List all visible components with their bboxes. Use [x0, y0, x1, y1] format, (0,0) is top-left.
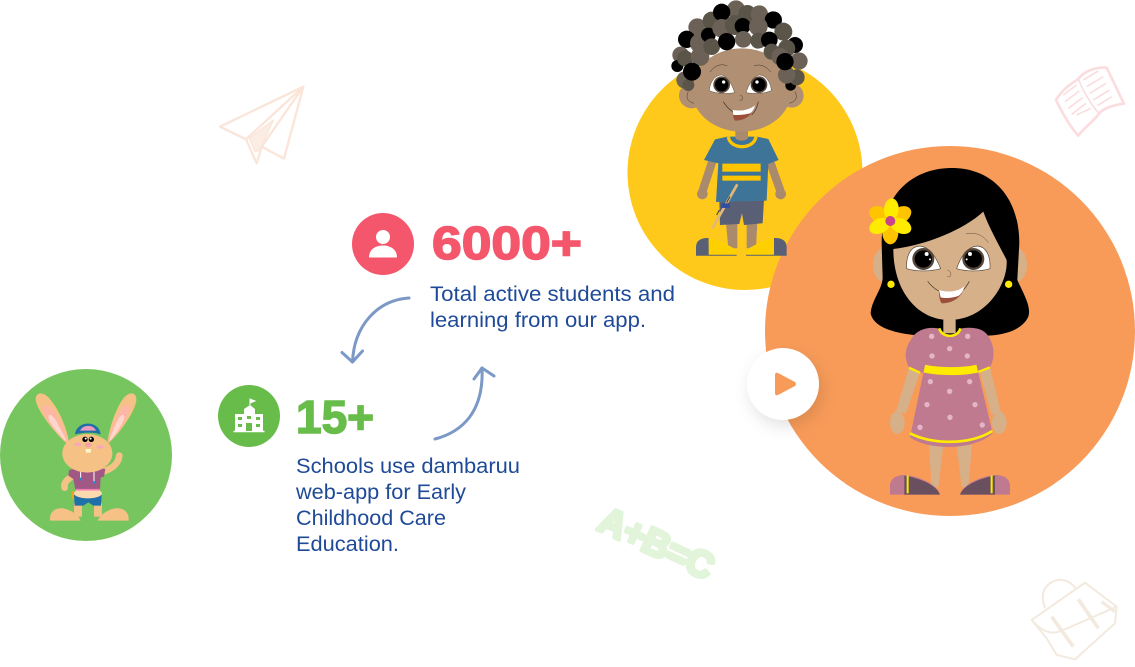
girl dress — [906, 328, 994, 447]
girl legs — [929, 445, 972, 487]
rabbit belly — [74, 488, 102, 498]
girl shoes — [890, 475, 1010, 495]
students number: 6000+ — [432, 217, 582, 269]
rabbit shirt — [68, 468, 105, 490]
play button — [747, 348, 819, 420]
schools description: Childhood Care — [296, 507, 446, 530]
boy head — [692, 48, 792, 132]
play button disc — [747, 348, 819, 420]
schools description — [295, 455, 520, 556]
boy mouth — [723, 102, 758, 121]
rabbit ears — [36, 393, 136, 443]
girl arms — [896, 367, 1001, 415]
decoration: open book — [1056, 68, 1124, 136]
arrow: schools to students — [435, 368, 494, 439]
schools number: 15+ — [296, 391, 374, 443]
boy arms — [702, 163, 781, 192]
boy ears — [679, 83, 804, 108]
schools description: Education. — [296, 533, 399, 556]
girl face — [893, 212, 1007, 320]
rabbit cheeks — [75, 443, 103, 449]
girl earrings — [887, 281, 1012, 288]
play triangle — [775, 373, 796, 395]
rabbit feet — [50, 508, 129, 521]
students description: Total active students and — [430, 283, 675, 306]
green circle — [0, 369, 172, 541]
students icon — [352, 213, 414, 275]
boy shoes — [696, 238, 787, 255]
rabbit head — [62, 434, 112, 473]
girl ears — [873, 248, 1027, 282]
girl mouth — [928, 281, 969, 303]
orange circle — [765, 146, 1135, 516]
decoration: school bag — [1032, 580, 1117, 659]
character: boy — [671, 0, 808, 255]
boy hands — [697, 189, 786, 199]
decoration: paper plane — [220, 87, 303, 163]
rabbit hoodie strings — [79, 471, 96, 484]
students description — [430, 283, 675, 332]
girl dress trim — [909, 328, 992, 442]
boy legs — [726, 223, 757, 248]
rabbit arms — [64, 456, 119, 488]
students description: learning from our app. — [430, 309, 646, 332]
schools icon — [218, 385, 280, 447]
girl hair — [871, 168, 1029, 336]
girl neck — [943, 317, 956, 333]
character: rabbit — [36, 393, 136, 521]
carrot — [71, 491, 75, 499]
boy shirt stripes — [722, 164, 761, 181]
boy stick — [712, 184, 737, 228]
girl flower — [866, 198, 915, 244]
rabbit shorts — [74, 495, 102, 506]
girl dress dots — [917, 334, 985, 430]
girl hands — [890, 411, 1007, 434]
boy eyes — [687, 65, 796, 103]
stat: 6000+ students — [352, 213, 675, 332]
girl eyes — [907, 233, 990, 277]
rabbit legs — [74, 503, 102, 517]
schools description: web-app for Early — [295, 481, 467, 504]
arrow: students to schools — [342, 298, 409, 362]
boy neck and collar — [728, 128, 756, 147]
stat: 15+ schools — [218, 385, 520, 556]
yellow circle — [628, 55, 862, 290]
boy shirt — [704, 137, 779, 202]
rabbit nose and teeth — [85, 443, 92, 453]
boy hair — [671, 0, 808, 91]
schools description: Schools use dambaruu — [296, 455, 520, 478]
decoration: A+B=C: A+B=C — [593, 499, 721, 588]
rabbit shirt trim — [75, 487, 100, 492]
character: girl — [866, 168, 1029, 495]
boy shorts — [719, 200, 764, 225]
rabbit eyes — [82, 437, 94, 442]
rabbit cap — [75, 424, 101, 434]
